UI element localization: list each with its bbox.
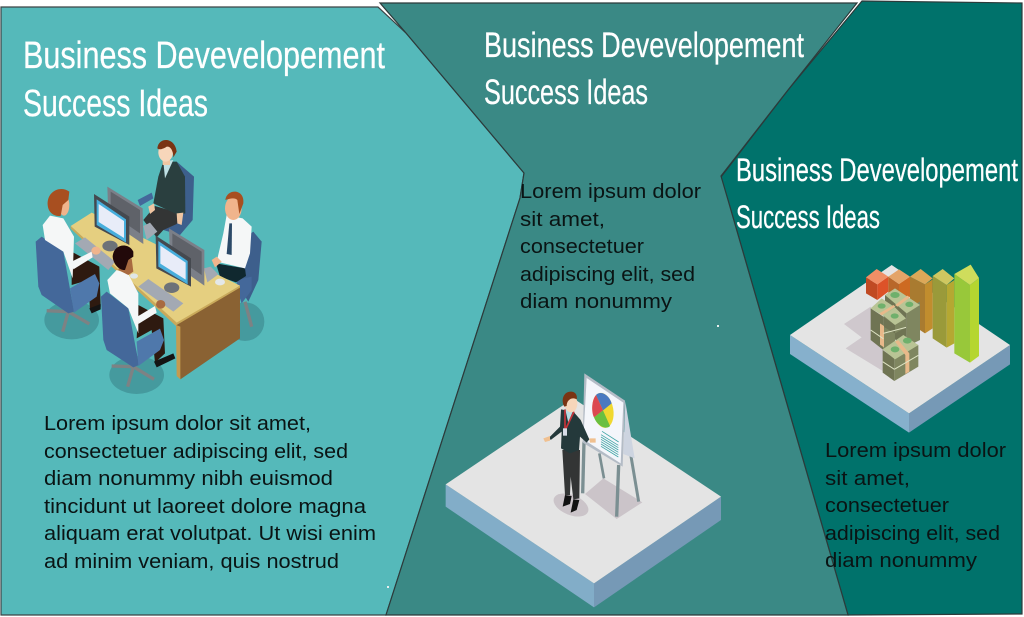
chart text lines	[601, 431, 619, 457]
platform	[790, 265, 1010, 433]
middle heading: Success Ideas	[484, 73, 648, 112]
left body text: diam nonummy nibh euismod	[44, 468, 333, 490]
right body text: sit amet,	[825, 468, 910, 490]
middle heading	[484, 26, 804, 112]
left body text	[44, 413, 376, 573]
left body text: tincidunt ut laoreet dolore magna	[44, 496, 367, 518]
person: front	[101, 245, 175, 387]
left heading	[23, 35, 385, 125]
person: left	[36, 189, 101, 332]
middle body text: adipiscing elit, sed	[520, 264, 695, 286]
left body text: ad minim veniam, quis nostrud	[44, 551, 339, 573]
presenter	[543, 392, 596, 513]
middle body text: sit amet,	[520, 209, 605, 231]
stray dots	[387, 325, 719, 588]
illustration: bar chart and money on platform	[790, 265, 1010, 433]
money stacks	[871, 288, 920, 381]
right body text	[825, 440, 1006, 572]
right heading	[736, 152, 1018, 235]
middle body text: Lorem ipsum dolor	[520, 181, 701, 203]
illustration: office team at desk	[36, 140, 264, 394]
right body text: diam nonummy	[825, 550, 977, 572]
left heading: Success Ideas	[23, 83, 208, 125]
platform	[446, 398, 721, 607]
desk	[71, 213, 240, 379]
3D bars	[866, 265, 979, 363]
panel: right	[721, 1, 1022, 615]
pie chart	[590, 391, 616, 430]
illustration: presenter on platform	[446, 373, 721, 607]
middle heading: Business Devevelopement	[484, 26, 804, 65]
middle body text: consectetuer	[520, 236, 644, 258]
right body text: Lorem ipsum dolor	[825, 440, 1006, 462]
right body text: adipiscing elit, sed	[825, 523, 1000, 545]
left heading: Business Devevelopement	[23, 35, 385, 77]
left body text: consectetuer adipiscing elit, sed	[44, 441, 348, 463]
right heading: Success Ideas	[736, 199, 880, 235]
person: top	[138, 140, 194, 237]
person: right	[212, 192, 262, 327]
right body text: consectetuer	[825, 495, 949, 517]
left body text: aliquam erat volutpat. Ut wisi enim	[44, 523, 376, 545]
left body text: Lorem ipsum dolor sit amet,	[44, 413, 311, 435]
middle body text: diam nonummy	[520, 291, 672, 313]
panel: left	[1, 7, 524, 615]
monitors and keyboards	[75, 187, 225, 312]
middle body text	[520, 181, 701, 313]
flip chart easel	[583, 373, 639, 517]
panel: middle	[380, 3, 857, 615]
